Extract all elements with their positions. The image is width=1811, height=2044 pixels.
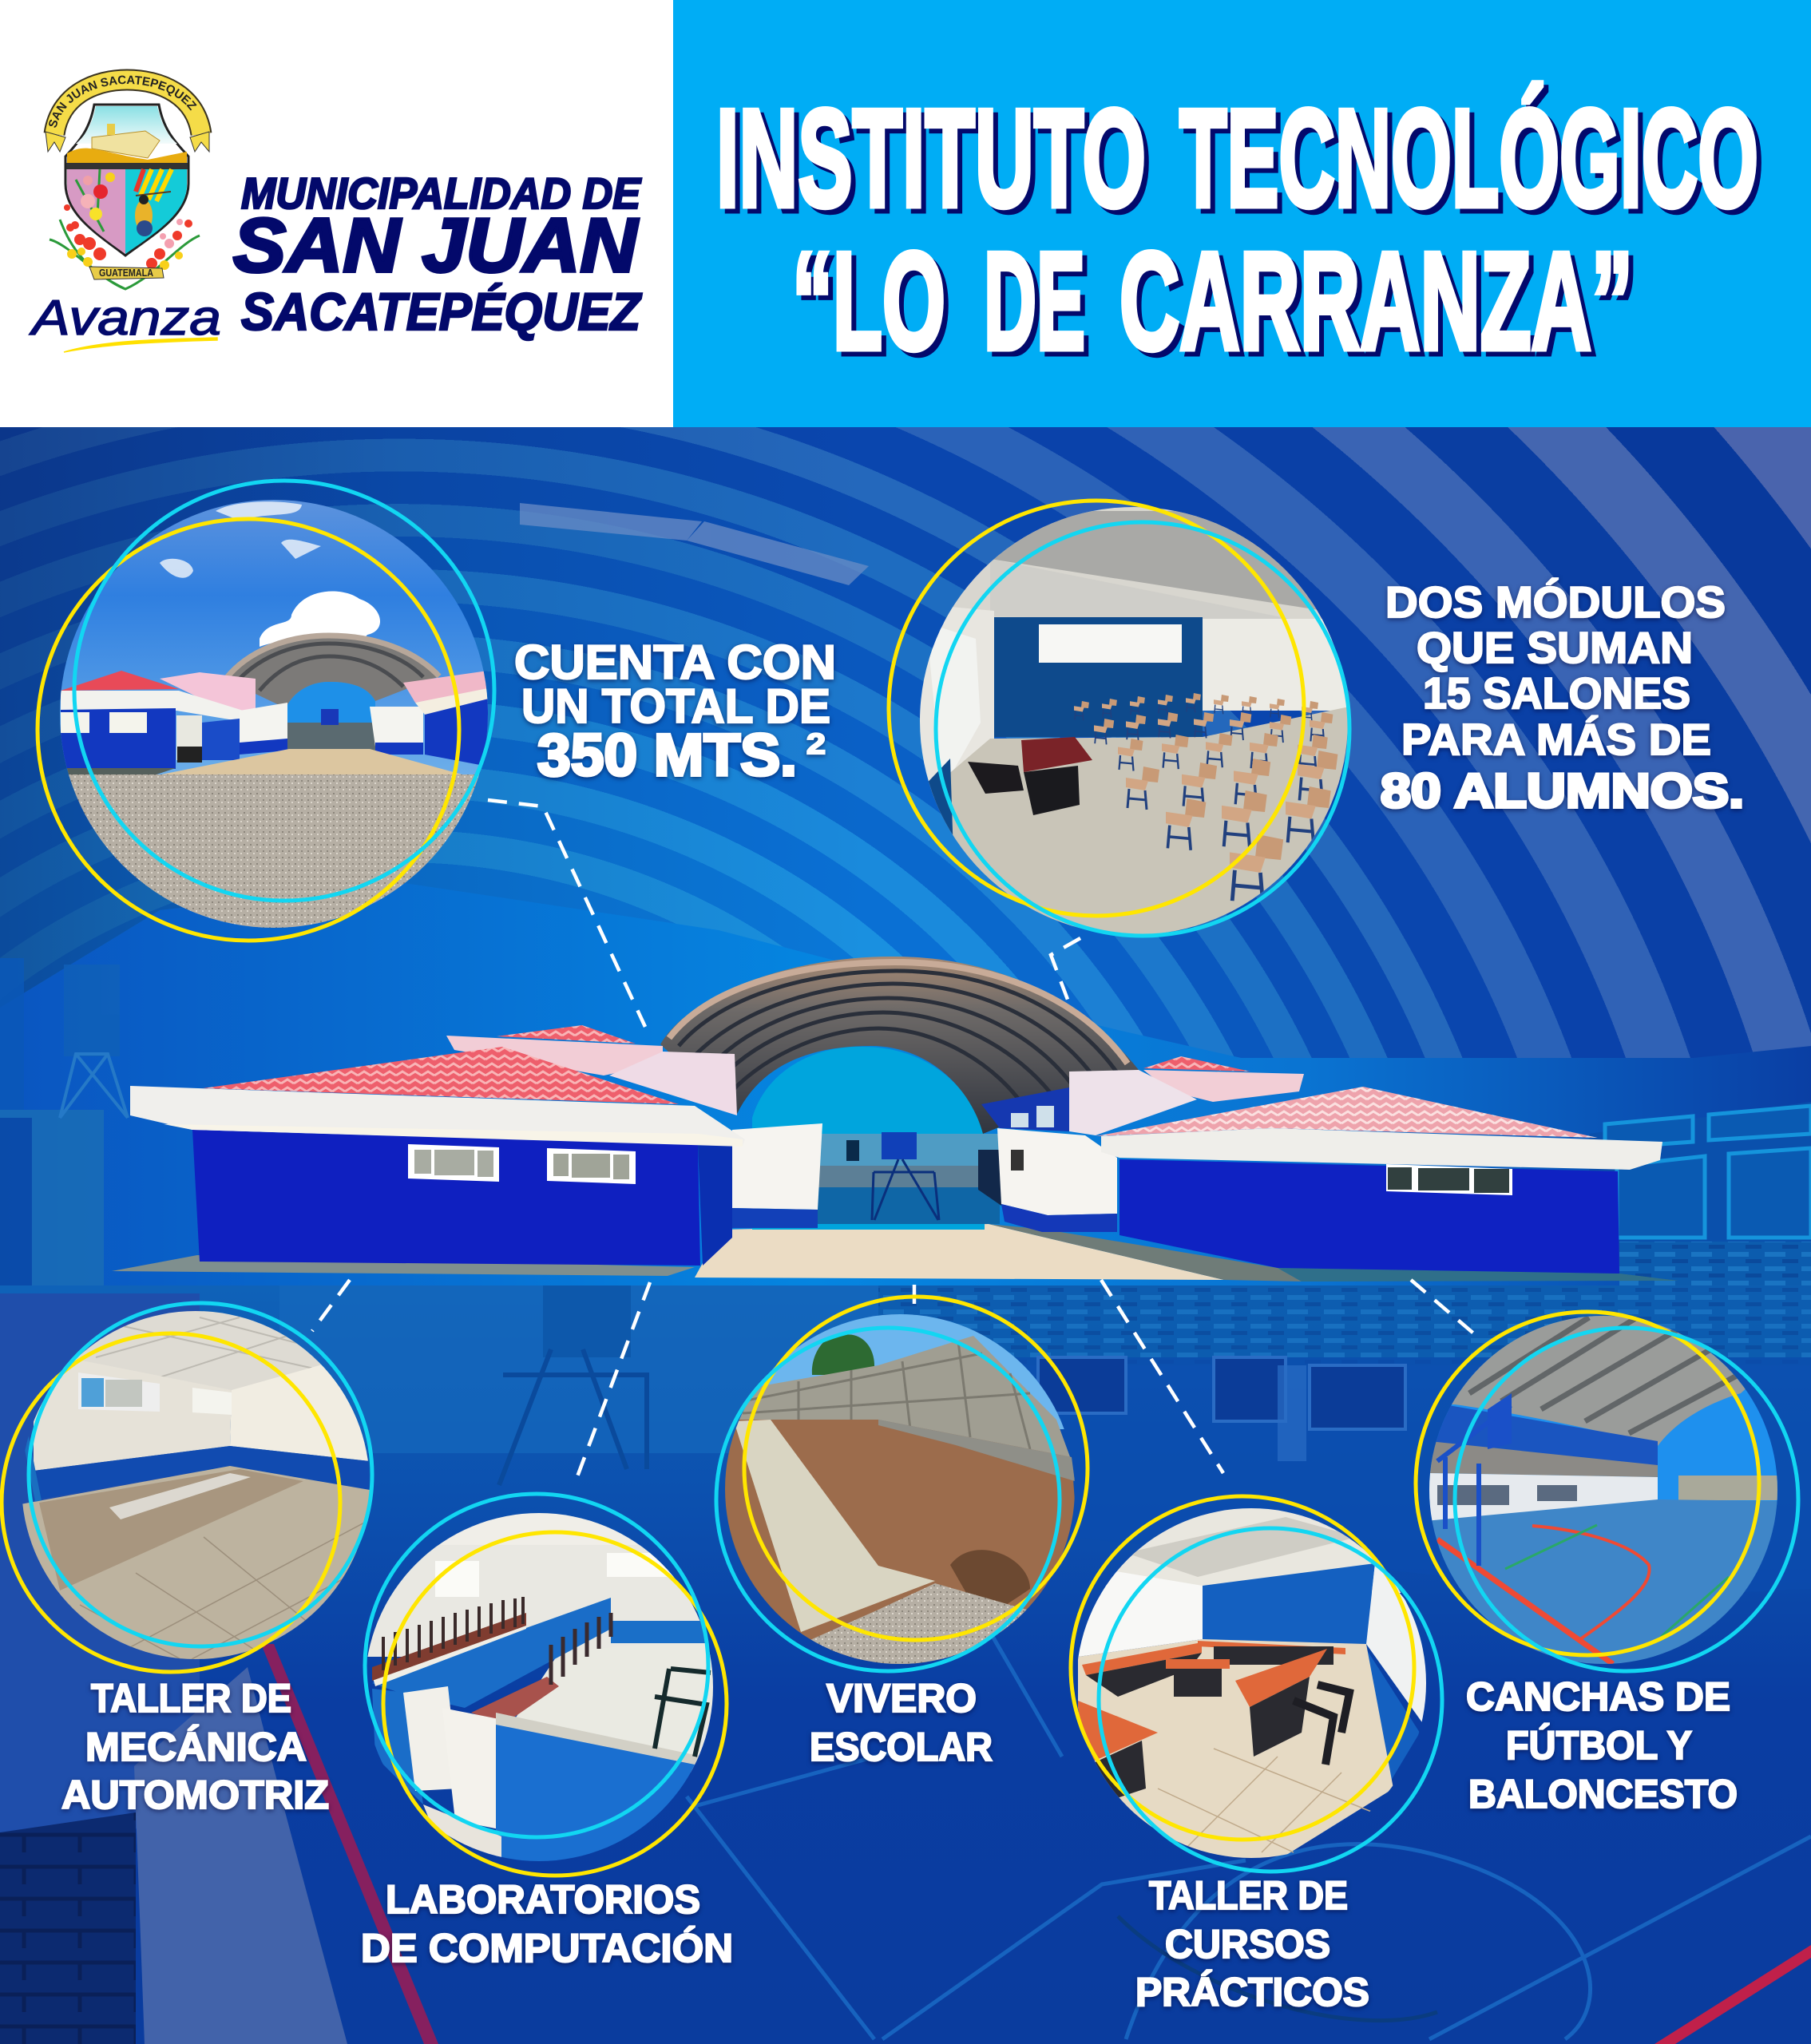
connector: sports courts xyxy=(1411,1280,1476,1336)
photo circle: computer laboratories xyxy=(359,1494,727,1876)
text: school nursery label: VIVERO xyxy=(826,1676,977,1721)
photo circle: school nursery xyxy=(716,1297,1088,1671)
text: mechanics workshop label: MECÁNICA xyxy=(85,1725,307,1769)
photo circle: football and basketball courts xyxy=(1416,1309,1798,1671)
text: computer labs label xyxy=(361,1877,733,1971)
text: computer labs label: DE COMPUTACIÓN xyxy=(361,1926,733,1971)
header: white logo panel xyxy=(0,0,673,427)
text: modules and classrooms: PARA MÁS DE xyxy=(1401,715,1711,764)
background: left water tower and dark wall xyxy=(0,958,128,1297)
logo: municipality name xyxy=(233,168,642,341)
text: 350 square metres: UN TOTAL DE xyxy=(521,679,830,733)
text: modules and classrooms: DOS MÓDULOS xyxy=(1385,577,1726,627)
text: modules and classrooms: 15 SALONES xyxy=(1423,668,1690,718)
background: light roof panels xyxy=(520,503,869,585)
connector: school nursery xyxy=(913,1285,916,1314)
photo circle: campus panorama xyxy=(38,481,495,941)
text: mechanics workshop label: AUTOMOTRIZ xyxy=(61,1773,329,1817)
text: sports courts label: CANCHAS DE xyxy=(1466,1674,1730,1719)
background: lower court and building reflection xyxy=(0,1285,1811,2044)
connector: computer labs xyxy=(574,1282,650,1485)
logo: Avanza wordmark with swoosh: Avanza xyxy=(28,291,221,346)
title: DE xyxy=(984,223,1085,378)
connector: practical courses xyxy=(1101,1280,1223,1473)
title: INSTITUTO xyxy=(716,80,1146,236)
connector: mechanics workshop xyxy=(312,1280,350,1331)
text: 350 square metres xyxy=(514,636,836,788)
text: modules and classrooms xyxy=(1381,577,1744,818)
text: sports courts label xyxy=(1466,1674,1738,1816)
text: sports courts label: BALONCESTO xyxy=(1468,1772,1738,1816)
text: modules and classrooms: 80 ALUMNOS. xyxy=(1381,764,1744,818)
text: practical courses label xyxy=(1135,1873,1369,2014)
title: “LO xyxy=(792,223,945,378)
text: school nursery label xyxy=(810,1676,993,1769)
text: 350 square metres: 2 xyxy=(806,727,826,760)
logo: municipality name: SAN JUAN xyxy=(233,203,639,288)
logo: municipal coat of arms: SAN JUAN SACATEPEQUEZ xyxy=(49,75,196,128)
background: right windows and brick wall xyxy=(1589,1102,1811,1297)
text: practical courses label: TALLER DE xyxy=(1149,1873,1348,1918)
text: 350 square metres: 350 MTS. xyxy=(537,722,797,788)
logo: municipality name: SACATEPÉQUEZ xyxy=(241,282,642,341)
background: sky below the arches xyxy=(0,427,1811,1297)
text: mechanics workshop label xyxy=(61,1676,329,1817)
photo circle: practical courses classroom xyxy=(1070,1496,1442,1872)
text: computer labs label: LABORATORIOS xyxy=(386,1877,700,1922)
text: mechanics workshop label: TALLER DE xyxy=(91,1676,291,1721)
logo: municipal coat of arms: GUATEMALA xyxy=(99,267,153,279)
header: blue title panel xyxy=(673,0,1811,427)
central building photo illustration xyxy=(112,957,1678,1281)
text: 350 square metres: CUENTA CON xyxy=(514,636,836,689)
logo: municipality name: MUNICIPALIDAD DE xyxy=(241,168,642,218)
connector: classroom photo to building xyxy=(1051,938,1080,1010)
photo circle: classroom with desks xyxy=(889,501,1349,938)
background: corrugated roof arches xyxy=(0,427,1811,1058)
photo circle: mechanics workshop xyxy=(2,1303,375,1672)
text: practical courses label: CURSOS xyxy=(1165,1922,1330,1967)
text: school nursery label: ESCOLAR xyxy=(810,1725,993,1769)
title xyxy=(716,80,1758,378)
text: practical courses label: PRÁCTICOS xyxy=(1135,1970,1369,2014)
connector: 350 mts photo to building xyxy=(488,800,645,1027)
logo: municipal coat of arms xyxy=(43,69,212,291)
text: modules and classrooms: QUE SUMAN xyxy=(1417,623,1693,672)
text: sports courts label: FÚTBOL Y xyxy=(1506,1723,1692,1768)
